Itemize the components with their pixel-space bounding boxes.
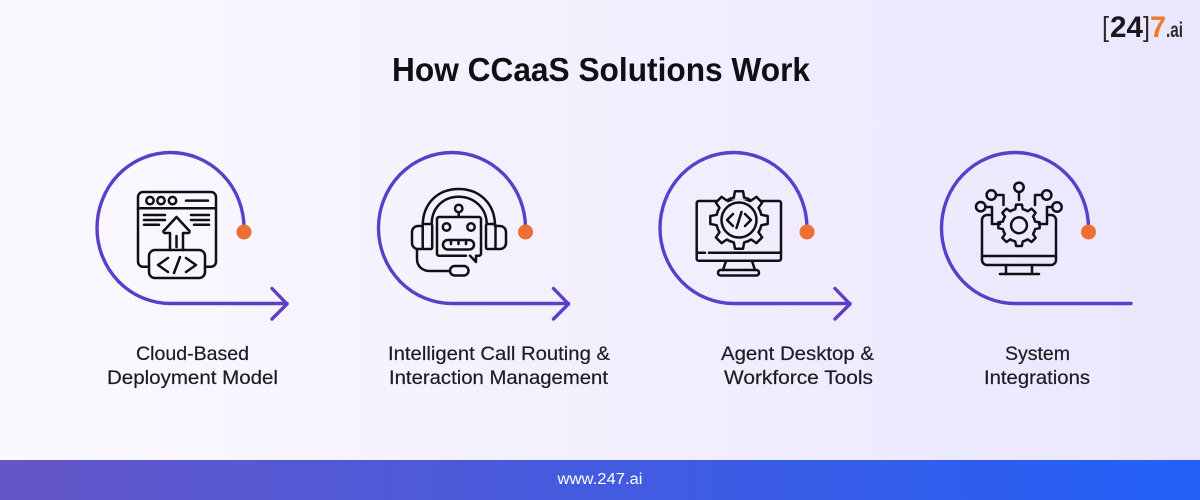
label 2: Intelligent Call Routing & bbox=[388, 343, 610, 365]
icon: robot headset bbox=[412, 189, 506, 276]
curved line 4 bbox=[942, 152, 1131, 304]
label 3: Workforce Tools bbox=[724, 367, 873, 389]
title: How CCaaS Solutions Work bbox=[392, 52, 810, 89]
label 1: Deployment Model bbox=[107, 367, 278, 389]
logo: [24]7.ai: .ai bbox=[1166, 19, 1183, 42]
step 4: system integrations bbox=[942, 152, 1131, 389]
label 3: Agent Desktop & bbox=[721, 343, 874, 365]
label 4: Integrations bbox=[984, 367, 1090, 389]
label 1: Cloud-Based bbox=[136, 343, 249, 365]
step 1: cloud-based deployment model bbox=[97, 152, 287, 389]
step 3: agent desktop bbox=[660, 152, 874, 389]
step 2: intelligent call routing bbox=[378, 152, 610, 389]
logo: [24]7.ai: 24 bbox=[1110, 11, 1143, 44]
logo: [24]7.ai bbox=[1102, 11, 1183, 44]
curved arrow 2 bbox=[378, 152, 568, 319]
icon: browser window with code upload bbox=[138, 192, 216, 278]
logo: [24]7.ai: ] bbox=[1143, 11, 1150, 42]
logo: [24]7.ai: 7 bbox=[1150, 11, 1166, 44]
footer bar bbox=[0, 460, 1200, 500]
label 4: System bbox=[1005, 343, 1070, 365]
footer url: www.247.ai bbox=[556, 471, 642, 488]
label 2: Interaction Management bbox=[389, 367, 609, 389]
logo: [24]7.ai: [ bbox=[1102, 11, 1109, 42]
curved arrow 3 bbox=[660, 152, 850, 319]
icon: monitor with code gear bbox=[697, 191, 781, 276]
icon: monitor with gear and nodes bbox=[976, 183, 1062, 274]
curved arrow 1 bbox=[97, 152, 287, 319]
